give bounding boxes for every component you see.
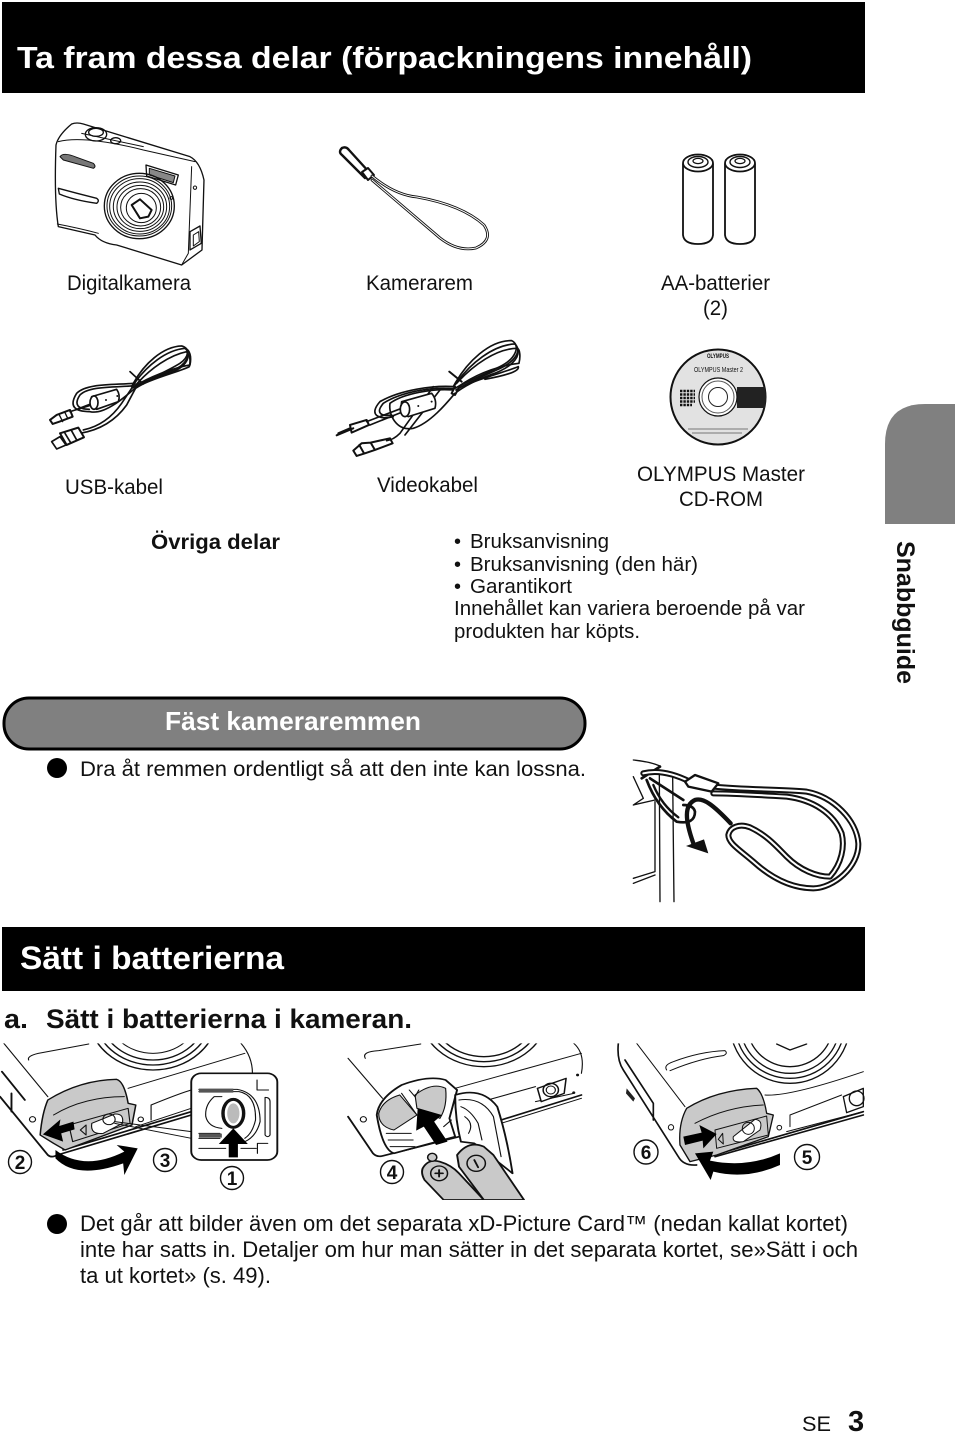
label: OLYMPUS Master CD-ROM: CD-ROM xyxy=(679,488,763,511)
side tab: Snabbguide xyxy=(891,541,919,684)
illustration: close battery cover: 5 xyxy=(802,1148,813,1169)
section banner: insert batteries xyxy=(2,927,865,991)
icon: AA batteries xyxy=(683,154,755,244)
label: OLYMPUS Master CD-ROM: OLYMPUS Master xyxy=(637,463,805,486)
illustration: open battery cover xyxy=(0,1043,278,1190)
label: Videokabel: Videokabel xyxy=(377,474,478,497)
label: OLYMPUS Master CD-ROM xyxy=(637,463,805,511)
icon: OLYMPUS Master CD-ROM: OLYMPUS Master 2 xyxy=(694,365,743,374)
icon: video cable xyxy=(337,341,520,456)
page number xyxy=(802,1406,864,1434)
text block: other parts list: • xyxy=(454,576,461,598)
step heading a: a. xyxy=(4,1004,28,1034)
heading pill: attach strap xyxy=(4,698,585,749)
illustration: insert batteries xyxy=(347,1043,583,1200)
illustration: insert batteries: 4 xyxy=(387,1163,398,1184)
text block: other parts list: produkten har köpts. xyxy=(454,621,640,643)
icon: OLYMPUS Master CD-ROM: OLYMPUS xyxy=(707,354,729,360)
title banner xyxy=(2,2,865,93)
label: Digitalkamera: Digitalkamera xyxy=(67,272,191,295)
illustration: open battery cover: 2 xyxy=(15,1153,25,1174)
note: xD-Picture Card: ta ut kortet» (s. 49). xyxy=(80,1263,271,1288)
illustration: open battery cover: 1 xyxy=(227,1169,238,1190)
illustration: open battery cover: 3 xyxy=(160,1151,170,1172)
heading: other parts: Övriga delar xyxy=(151,531,280,554)
label: Kamerarem: Kamerarem xyxy=(366,272,473,295)
label: AA-batterier (2) xyxy=(661,272,770,320)
text block: other parts list: • xyxy=(454,554,461,576)
note: xD-Picture Card: Det går att bilder även om det separata xD-Picture Card™ (nedan kallat kortet) xyxy=(80,1211,848,1236)
title banner: Ta fram dessa delar (förpackningens innehåll) xyxy=(17,40,752,75)
text block: other parts list: Garantikort xyxy=(470,576,572,598)
heading pill: attach strap: Fäst kameraremmen xyxy=(165,706,421,736)
illustration: close battery cover xyxy=(617,1043,865,1180)
text block: other parts list: Bruksanvisning xyxy=(470,531,609,553)
icon: camera strap xyxy=(340,147,488,249)
icon: OLYMPUS Master CD-ROM xyxy=(670,350,766,444)
text block: other parts list: Innehållet kan variera beroende på var xyxy=(454,598,805,620)
icon: USB cable xyxy=(50,346,191,449)
text block: other parts list: Bruksanvisning (den här) xyxy=(470,554,698,576)
note: xD-Picture Card xyxy=(47,1211,858,1288)
illustration: strap on camera xyxy=(633,760,858,902)
icon: digital camera xyxy=(55,123,204,265)
step heading a: Sätt i batterierna i kameran. xyxy=(46,1004,412,1034)
note: pull strap: Dra åt remmen ordentligt så att den inte kan lossna. xyxy=(80,758,586,781)
illustration: close battery cover: 6 xyxy=(641,1143,651,1164)
text block: other parts list: • xyxy=(454,531,461,553)
side tab xyxy=(885,404,955,684)
label: AA-batterier (2): AA-batterier xyxy=(661,272,770,295)
text block: other parts list xyxy=(454,531,805,643)
note: xD-Picture Card: inte har satts in. Detaljer om hur man sätter in det separata kortet, se»Sätt i och xyxy=(80,1237,858,1262)
label: USB-kabel: USB-kabel xyxy=(65,476,163,499)
label: AA-batterier (2): (2) xyxy=(703,297,728,320)
section banner: insert batteries: Sätt i batterierna xyxy=(20,940,284,976)
